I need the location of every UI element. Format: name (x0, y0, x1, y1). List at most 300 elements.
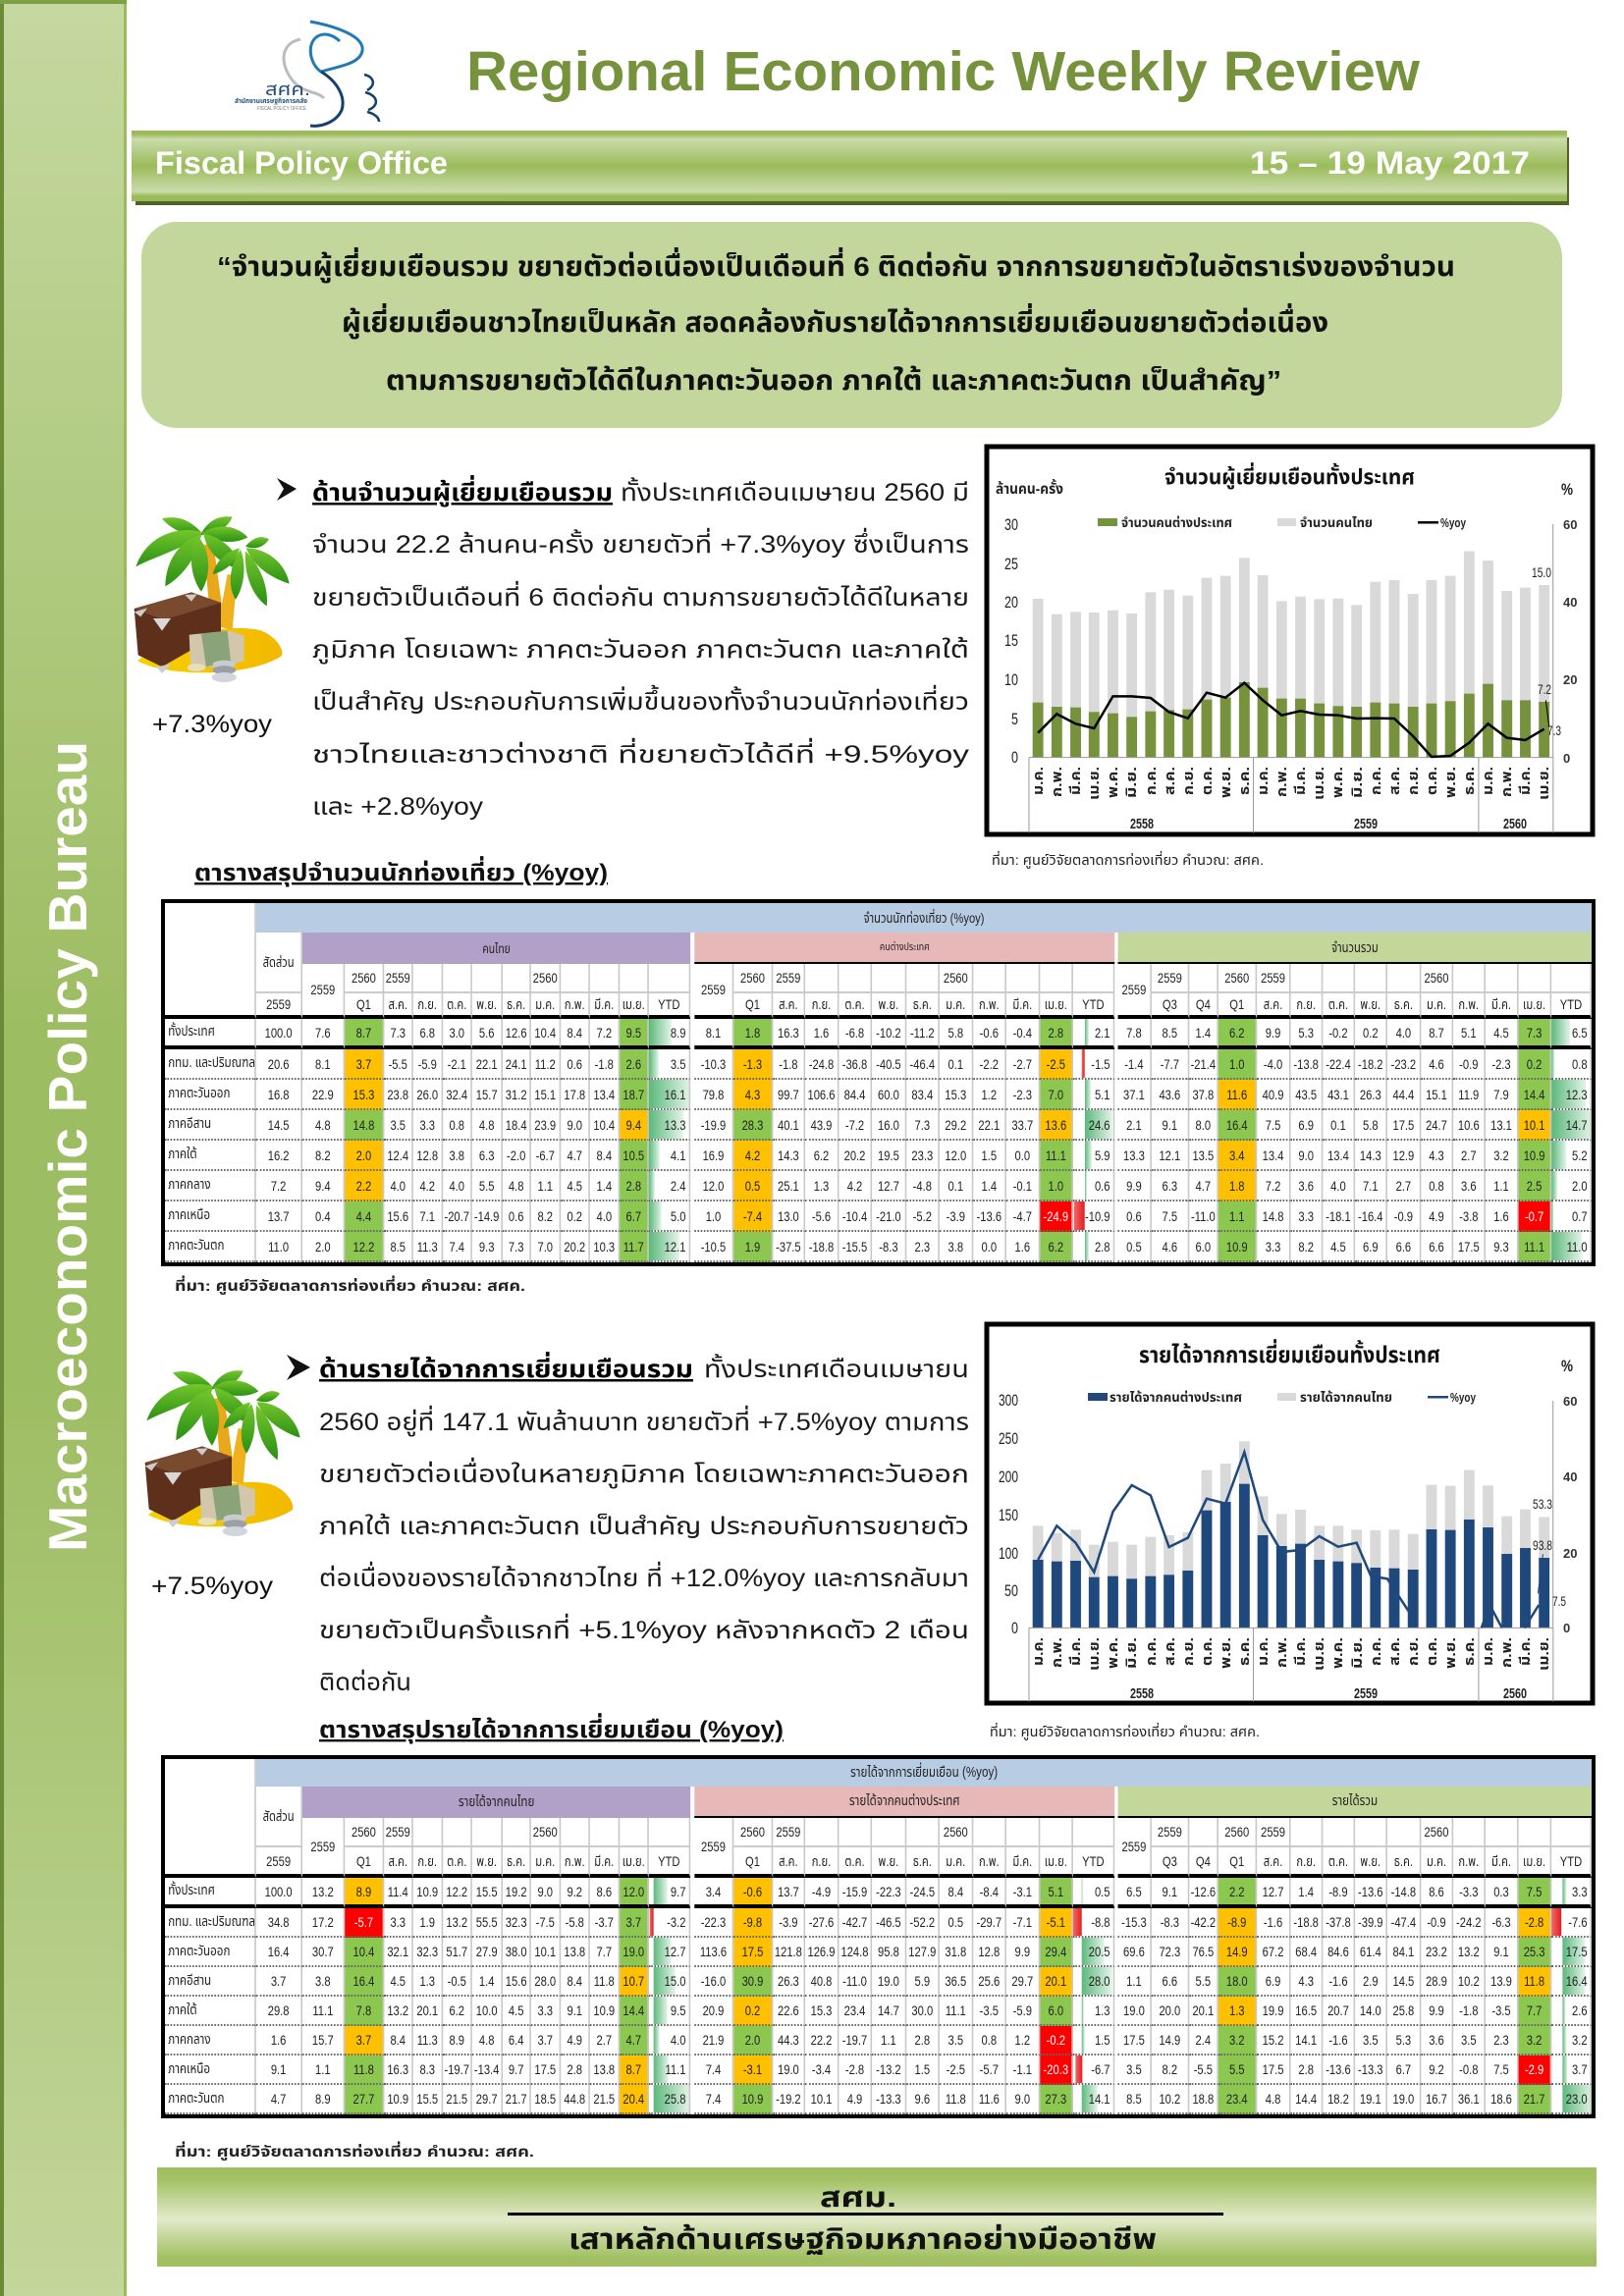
left axis labels: 0 (1011, 1619, 1018, 1637)
row: East: 113.6 (700, 1944, 727, 1959)
row: whole country: 13.7 (778, 1883, 799, 1898)
row: whole country: 13.2 (312, 1883, 334, 1898)
row: Bangkok: -5.1 (1047, 1914, 1065, 1930)
row: Northeast: 8.0 (1196, 1117, 1211, 1133)
month labels: พ.ย. (1442, 1637, 1458, 1669)
row: East: 10.4 (353, 1944, 374, 1959)
row: North: -2.5 (947, 2061, 965, 2077)
table: revenue: ต.ค. (1328, 1853, 1348, 1869)
table: revenue: ม.ค. (535, 1853, 555, 1869)
table: visitors: เม.ย. (1523, 996, 1545, 1012)
row: West: 18.8 (1192, 2091, 1214, 2107)
row: South: 14.3 (1360, 1147, 1381, 1162)
row: Central: 0.6 (1095, 1178, 1110, 1194)
row: West: 1.6 (1015, 1239, 1030, 1255)
row: whole country: 11.4 (388, 1883, 408, 1898)
row: Central: 2.4 (1196, 2032, 1211, 2048)
row: Bangkok: -2.3 (1491, 1056, 1511, 1072)
row: Bangkok: -52.2 (910, 1914, 935, 1930)
text block: revenue (319, 1352, 969, 1696)
row: Bangkok: 1.0 (1229, 1056, 1245, 1072)
row: West: 0.5 (1126, 1239, 1142, 1255)
row: East: 51.7 (446, 1944, 467, 1959)
month labels: ส.ค. (1386, 767, 1402, 795)
row: Bangkok (165, 1049, 1592, 1080)
row: West: 8.5 (1126, 2091, 1142, 2107)
row: South: 13.4 (1327, 1147, 1349, 1162)
row: whole country: 9.0 (537, 1883, 553, 1898)
row: West: 16.7 (1426, 2091, 1447, 2107)
table: revenue: 2559 (1158, 1824, 1182, 1840)
row: North: -11.0 (1191, 1207, 1216, 1223)
row: Northeast: 6.6 (1163, 1973, 1177, 1989)
row: East: 12.8 (978, 1944, 1000, 1959)
logo: สศค. (265, 80, 310, 99)
table: visitors: ส.ค. (388, 996, 407, 1012)
row: East: 127.9 (908, 1944, 936, 1959)
row: Bangkok: -7.6 (1568, 1914, 1588, 1930)
row: Central: 17.5 (1123, 2032, 1145, 2048)
row: Bangkok: -18.2 (1358, 1056, 1383, 1072)
table: revenue: 2560 (533, 1824, 558, 1840)
row: East: 20.5 (1089, 1944, 1110, 1959)
table: revenue: YTD (1082, 1853, 1105, 1869)
row: Northeast: 1.3 (419, 1973, 435, 1989)
row: South: 5.9 (1095, 1147, 1110, 1162)
row: Northeast: 2.9 (1363, 1973, 1379, 1989)
row: Northeast: 10.6 (1458, 1117, 1480, 1133)
row: North: -5.6 (812, 1207, 831, 1223)
row: Bangkok: -2.8 (1525, 1914, 1543, 1930)
quote box: ตามการขยายตัวได้ดีในภาคตะวันออก ภาคใต้ และภาคตะวันตก เป็นสำคัญ” (386, 365, 1281, 396)
row: Central: 1.0 (1049, 1178, 1063, 1194)
row: South: -1.8 (1459, 2002, 1478, 2018)
row: South: 12.8 (416, 1147, 438, 1162)
row: whole country: 3.0 (449, 1025, 464, 1041)
row: East: 32.3 (416, 1944, 438, 1959)
table: visitors: ก.พ. (979, 996, 1000, 1012)
table: revenue: 2560 (352, 1824, 376, 1840)
source: chart 1: ที่มา: ศูนย์วิจัยตลาดการท่องเที่ยว คำนวณ: สศค. (992, 850, 1264, 869)
row: North: -21.0 (876, 1207, 901, 1223)
row: whole country: 8.9 (671, 1025, 685, 1041)
month labels: มิ.ย. (1349, 767, 1365, 798)
row: West: 11.7 (623, 1239, 644, 1255)
logo (233, 20, 383, 133)
table: visitors: ม.ค. (946, 996, 965, 1012)
row: Northeast: 8.4 (567, 1973, 582, 1989)
row: West: 2.3 (915, 1239, 930, 1255)
row: Northeast: 9.1 (1163, 1117, 1177, 1133)
row: Central: 2.8 (625, 1178, 641, 1194)
row: Bangkok: -3.2 (667, 1914, 685, 1930)
row: West: -37.5 (776, 1239, 801, 1255)
table: visitors: YTD (1560, 996, 1582, 1012)
row: West: 9.0 (1015, 2091, 1030, 2107)
row: Northeast: 18.0 (1226, 1973, 1248, 1989)
row: Bangkok: 13.2 (446, 1914, 467, 1930)
month labels: ก.ค. (1368, 1637, 1383, 1666)
row: West: 10.2 (1159, 2091, 1180, 2107)
logo: สำนักงานเศรษฐกิจการคลัง (235, 97, 307, 105)
row: East: 60.0 (878, 1086, 899, 1101)
row: Bangkok: -42.7 (842, 1914, 867, 1930)
row: Central: 15.7 (312, 2032, 334, 2048)
row: East: 11.9 (1458, 1086, 1479, 1101)
row: South: 30.0 (911, 2002, 933, 2018)
row: West: 23.4 (1226, 2091, 1248, 2107)
row: Central: 0.8 (1429, 1178, 1444, 1194)
row: East: 99.7 (778, 1086, 799, 1101)
chart: revenue (987, 1324, 1593, 1703)
month labels: ก.พ. (1049, 767, 1064, 797)
text block: revenue: ต่อเนื่องของรายได้จากชาวไทย ที่ +12.0%yoy และการกลับมา (319, 1561, 969, 1592)
left axis labels: 250 (999, 1429, 1018, 1448)
row: Central: 0.1 (948, 1178, 963, 1194)
row: Central: 3.5 (948, 2032, 963, 2048)
row: Central: 8.4 (390, 2032, 406, 2048)
legend: รายได้จากคนต่างประเทศ (1110, 1390, 1242, 1405)
row: whole country: 1.6 (814, 1025, 829, 1041)
row: Central: 1.4 (596, 1178, 612, 1194)
row: Central: 21.9 (703, 2032, 724, 2048)
month labels: ก.ค. (1143, 1637, 1159, 1666)
row: East: 84.1 (1392, 1944, 1414, 1959)
row: Central: 7.2 (1266, 1178, 1280, 1194)
row: whole country: 8.1 (706, 1025, 721, 1041)
text block: visitors: และ +2.8%yoy (312, 793, 484, 821)
row: North: 9.7 (509, 2061, 523, 2077)
row: Central: 1.1 (1493, 1178, 1509, 1194)
row: whole country: -3.3 (1459, 1883, 1478, 1898)
row: West: ภาคตะวันตก (168, 2091, 224, 2107)
month labels: ม.ค. (1255, 1637, 1271, 1666)
row: North: -0.8 (1459, 2061, 1478, 2077)
row: Central: 9.9 (1126, 1178, 1142, 1194)
row: Central: -1.6 (1328, 2032, 1348, 2048)
row: Bangkok: 55.5 (476, 1914, 498, 1930)
row: Central: 4.0 (390, 1178, 406, 1194)
arrow bullet 1 (277, 478, 297, 501)
banner (132, 131, 1569, 205)
table: revenue: เม.ย. (1045, 1853, 1067, 1869)
row: South: 9.9 (1429, 2002, 1444, 2018)
row: Bangkok: -4.0 (1264, 1056, 1282, 1072)
month labels: ก.พ. (1498, 1637, 1514, 1668)
row: whole country: 6.8 (419, 1025, 435, 1041)
row: West: 4.5 (1330, 1239, 1346, 1255)
row: East: 12.3 (1566, 1086, 1588, 1101)
table: revenue: มี.ค. (1012, 1853, 1032, 1869)
table: visitors (161, 899, 1596, 1266)
icon: palm and suitcase 1 (135, 516, 290, 682)
row: Northeast: 3.8 (315, 1973, 331, 1989)
row: South: ภาคใต้ (168, 1147, 197, 1162)
row: East: 16.4 (268, 1944, 290, 1959)
row: South: 19.9 (1263, 2002, 1283, 2018)
row: West: 21.7 (506, 2091, 527, 2107)
row: North: 8.7 (625, 2061, 641, 2077)
row: East: 13.2 (1458, 1944, 1480, 1959)
row: Northeast: 14.7 (1566, 1117, 1588, 1133)
row: Northeast: 7.5 (1266, 1117, 1280, 1133)
row: whole country: 8.7 (356, 1025, 371, 1041)
row: West: 7.3 (509, 1239, 523, 1255)
month labels: ก.ค. (1143, 767, 1159, 795)
row: Northeast: 17.5 (1392, 1117, 1414, 1133)
table: visitors: เม.ย. (1045, 996, 1067, 1012)
row: Bangkok: -9.8 (743, 1914, 762, 1930)
row: West: 8.5 (390, 1239, 406, 1255)
row: West: 4.6 (1163, 1239, 1177, 1255)
row: Central: 3.7 (356, 2032, 371, 2048)
row: Central: -4.8 (913, 1178, 932, 1194)
title: Regional Economic Weekly Review (466, 40, 1421, 103)
row: Bangkok: 0.6 (567, 1056, 582, 1072)
quote box: “จำนวนผู้เยี่ยมเยือนรวม ขยายตัวต่อเนื่องเป็นเดือนที่ 6 ติดต่อกัน จากการขยายตัวในอัตราเร่งของจำนวน (217, 246, 1455, 284)
row: Central: 1.6 (271, 2032, 286, 2048)
row: South: 16.9 (703, 1147, 724, 1162)
row: Central: 3.6 (1429, 2032, 1444, 2048)
month labels: เม.ย. (1311, 767, 1326, 800)
row: East: 15.3 (353, 1086, 374, 1101)
month labels: มี.ค. (1067, 767, 1083, 795)
row: whole country: -12.6 (1191, 1883, 1216, 1898)
row: East: 25.3 (1524, 1944, 1544, 1959)
table: visitors: 2560 (533, 970, 558, 986)
row: East: 76.5 (1192, 1944, 1214, 1959)
row: Bangkok: 32.3 (506, 1914, 527, 1930)
row: Northeast: 6.9 (1266, 1973, 1280, 1989)
row: South: 12.4 (387, 1147, 408, 1162)
row: Bangkok: 2.6 (625, 1056, 641, 1072)
row: Northeast: -1.6 (1328, 1973, 1348, 1989)
table: visitors: 2559 (1158, 970, 1182, 986)
row: Bangkok: -22.3 (701, 1914, 726, 1930)
row: North: 1.1 (1229, 1207, 1245, 1223)
row: Northeast: 0.8 (449, 1117, 464, 1133)
row: West: 36.1 (1458, 2091, 1480, 2107)
row: whole country: 0.5 (1095, 1883, 1110, 1898)
row: whole country: 8.5 (1163, 1025, 1177, 1041)
row: West: 2.0 (315, 1239, 331, 1255)
row: West: -18.8 (809, 1239, 834, 1255)
row: Northeast: 20.1 (1045, 1973, 1066, 1989)
table: revenue: 2559 (1261, 1824, 1285, 1840)
data labels: 15.0 (1532, 564, 1551, 580)
table: revenue: สัดส่วน (263, 1808, 295, 1824)
row: Northeast: 3.3 (419, 1117, 435, 1133)
row: South: 9.0 (1298, 1147, 1314, 1162)
row: whole country: 8.4 (567, 1025, 582, 1041)
left axis labels: 25 (1004, 555, 1018, 573)
month labels: ธ.ค. (1236, 767, 1252, 795)
row: Bangkok: 0.1 (948, 1056, 963, 1072)
table: revenue: 2560 (740, 1824, 765, 1840)
month labels: มี.ค. (1517, 767, 1533, 795)
data labels: 7.2 (1538, 681, 1551, 697)
row: East: 32.1 (387, 1944, 408, 1959)
row: South: 0.0 (1015, 1147, 1030, 1162)
row: East: 84.6 (1327, 1944, 1349, 1959)
row: Northeast: 40.1 (778, 1117, 799, 1133)
row: South: 3.3 (537, 2002, 553, 2018)
row: South: 10.9 (1524, 1147, 1544, 1162)
table: revenue: ก.พ. (565, 1853, 585, 1869)
row: South: 6.2 (814, 1147, 829, 1162)
row: Northeast: ภาคอีสาน (168, 1116, 211, 1132)
table: revenue: รายได้จากการเยี่ยมเยือน (%yoy) (850, 1765, 998, 1781)
row: North: -3.9 (947, 1207, 965, 1223)
row: Central: 14.9 (1159, 2032, 1180, 2048)
month labels: ต.ค. (1424, 767, 1439, 795)
row: Central: 0.8 (982, 2032, 997, 2048)
table: revenue: Q1 (1229, 1853, 1244, 1869)
row: Northeast (165, 1110, 1592, 1141)
row: Northeast: 16.4 (1226, 1117, 1248, 1133)
table: revenue: ธ.ค. (913, 1853, 932, 1869)
row: Bangkok: -10.3 (701, 1056, 726, 1072)
table: revenue: รายได้รวม (1332, 1793, 1378, 1809)
text block: visitors: ขยายตัวเป็นเดือนที่ 6 ติดต่อกัน ตามการขยายตัวได้ดีในหลาย (312, 580, 969, 612)
month labels: มิ.ย. (1123, 767, 1139, 798)
month labels: ก.ย. (1180, 1637, 1196, 1666)
row: Bangkok: -8.9 (1227, 1914, 1246, 1930)
row: North: 8.2 (1163, 2061, 1177, 2077)
legend: %yoy (1450, 1390, 1477, 1405)
table: revenue: ธ.ค. (1394, 1853, 1413, 1869)
row: Bangkok: -27.6 (809, 1914, 834, 1930)
row: West: 11.6 (979, 2091, 1000, 2107)
row: Northeast: 4.8 (315, 1117, 331, 1133)
row: Central: 7.2 (271, 1178, 286, 1194)
row: Bangkok: -1.8 (779, 1056, 798, 1072)
row: East: 23.8 (387, 1086, 408, 1101)
row: Central: 4.7 (625, 2032, 641, 2048)
row: Northeast: 28.9 (1426, 1973, 1447, 1989)
table: revenue: เม.ย. (1523, 1853, 1545, 1869)
row: South: 11.1 (946, 2002, 966, 2018)
row: West: 10.9 (1226, 1239, 1248, 1255)
row: South: 4.7 (567, 1147, 582, 1162)
row: whole country: 1.4 (1196, 1025, 1211, 1041)
row: West: 1.9 (745, 1239, 760, 1255)
row: Northeast: 13.9 (1490, 1973, 1512, 1989)
row: North: 2.8 (567, 2061, 582, 2077)
row: North: -0.9 (1394, 1207, 1413, 1223)
year labels (1130, 1685, 1527, 1702)
row: Northeast: 23.9 (534, 1117, 556, 1133)
row: whole country: 8.6 (596, 1883, 612, 1898)
row: whole country: -4.9 (812, 1883, 831, 1898)
table: revenue: เม.ย. (623, 1853, 645, 1869)
row: Central: 4.2 (419, 1178, 435, 1194)
row: West: 6.0 (1196, 1239, 1211, 1255)
row: Bangkok: -37.8 (1326, 1914, 1351, 1930)
row: East: 17.8 (564, 1086, 585, 1101)
row: East: 30.7 (312, 1944, 334, 1959)
row: North: -24.9 (1044, 1207, 1068, 1223)
table: revenue: 2559 (310, 1838, 335, 1853)
text block: revenue: ติดต่อกัน (319, 1669, 411, 1696)
axis and group lines (1029, 758, 1553, 832)
row: South: 3.4 (1229, 1147, 1245, 1162)
row: North: 8.3 (419, 2061, 435, 2077)
row: whole country: 16.3 (778, 1025, 799, 1041)
row: South: 10.9 (593, 2002, 615, 2018)
row: whole country: 8.6 (1429, 1883, 1444, 1898)
table: revenue: 2560 (1425, 1824, 1448, 1840)
row: Central: 4.5 (567, 1178, 582, 1194)
row: Central: 2.5 (1527, 1178, 1542, 1194)
row: East: 84.4 (844, 1086, 865, 1101)
month labels: ต.ค. (1199, 767, 1215, 795)
row: South: 1.5 (982, 1147, 997, 1162)
row: South: 16.2 (268, 1147, 290, 1162)
row: West: 19.0 (1392, 2091, 1414, 2107)
row: North: -2.8 (845, 2061, 864, 2077)
row: South: 10.0 (476, 2002, 498, 2018)
row: whole country: 8.7 (1429, 1025, 1444, 1041)
row: Central: 4.9 (567, 2032, 582, 2048)
row: South: 6.3 (479, 1147, 494, 1162)
row: North: 11.8 (353, 2061, 374, 2077)
row: whole country: 10.9 (416, 1883, 438, 1898)
row: North: -4.7 (1013, 1207, 1032, 1223)
row: Bangkok: -40.5 (876, 1056, 901, 1072)
row: East: 37.8 (1192, 1086, 1214, 1101)
table: visitors: 2559 (701, 982, 726, 997)
row: whole country: -15.9 (842, 1883, 867, 1898)
row: East: 38.0 (506, 1944, 527, 1959)
heading: table 1: ตารางสรุปจำนวนนักท่องเที่ยว (%yoy) (194, 856, 608, 887)
row: Northeast: 0.1 (1330, 1117, 1346, 1133)
row: Bangkok: -21.4 (1191, 1056, 1216, 1072)
row: North: -19.7 (444, 2061, 469, 2077)
month labels: พ.ย. (1218, 1637, 1233, 1669)
row: South: -3.5 (1491, 2002, 1511, 2018)
table: revenue: ม.ค. (1427, 1853, 1446, 1869)
row: Central: 3.2 (1229, 2032, 1245, 2048)
row: North: 19.0 (778, 2061, 799, 2077)
row: North: -13.3 (1358, 2061, 1383, 2077)
row: whole country: -6.8 (845, 1025, 864, 1041)
table: visitors: ม.ค. (1427, 996, 1446, 1012)
table: revenue: ก.ย. (417, 1853, 437, 1869)
row: Northeast: 7.3 (915, 1117, 930, 1133)
row: West: 6.6 (1396, 1239, 1411, 1255)
row: whole country: ทั้งประเทศ (168, 1024, 215, 1040)
row: East: 16.1 (665, 1086, 685, 1101)
left axis labels: 50 (1004, 1581, 1018, 1600)
row: West: 4.7 (271, 2091, 286, 2107)
month labels: มี.ค. (1517, 1637, 1533, 1666)
row: East: 13.8 (564, 1944, 585, 1959)
table: visitors: ต.ค. (1328, 996, 1348, 1012)
row: Bangkok: -29.7 (977, 1914, 1001, 1930)
table: visitors: พ.ย. (879, 996, 898, 1012)
footer (157, 2167, 1597, 2267)
table: revenue: รายได้จากคนต่างประเทศ (849, 1793, 960, 1809)
table: revenue: Q3 (1163, 1853, 1177, 1869)
left axis labels (999, 1391, 1018, 1637)
row: South: 19.0 (1123, 2002, 1145, 2018)
row: North: -16.4 (1358, 1207, 1383, 1223)
month labels: เม.ย. (1311, 1637, 1326, 1671)
table: visitors: 2559 (386, 970, 410, 986)
row: South: 12.9 (1392, 1147, 1414, 1162)
row: South: 23.4 (844, 2002, 865, 2018)
